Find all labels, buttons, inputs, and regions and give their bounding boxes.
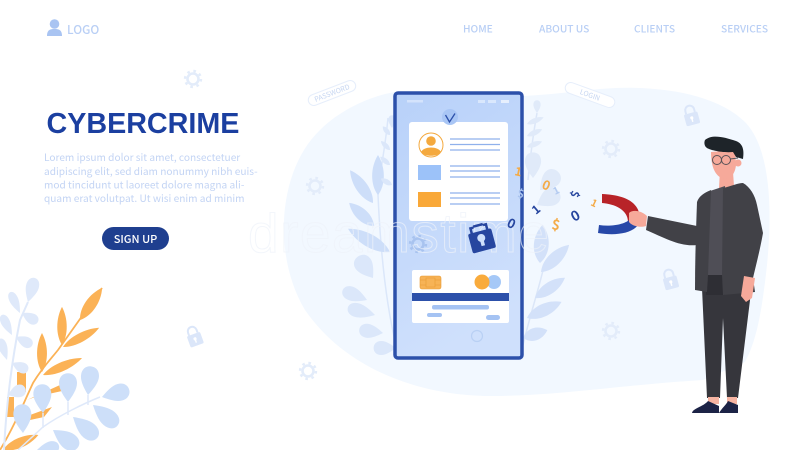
man with magnet	[598, 137, 763, 413]
check badge	[442, 109, 458, 125]
chip	[420, 276, 441, 289]
body text: mod tincidunt ut laoreet dolore magna ali-	[44, 176, 245, 192]
flying characters: 1	[513, 162, 524, 180]
tag: password: PASSWORD	[313, 82, 351, 105]
phone body	[395, 93, 522, 358]
navigation: menu links: CLIENTS	[634, 20, 675, 36]
flying characters	[504, 162, 601, 235]
body text: adipiscing elit, sed diam nonummy nibh euis-	[44, 163, 258, 178]
sign up button: SIGN UP	[114, 231, 157, 247]
plant: right of phone	[521, 100, 573, 345]
flying characters: 1	[550, 182, 562, 198]
body text: Lorem ipsum dolor sit amet, consectetuer	[44, 149, 240, 164]
decorative plant: bottom left, orange	[0, 285, 107, 450]
navigation: logo	[47, 19, 99, 38]
phone	[248, 93, 550, 358]
flying characters: 1	[589, 194, 601, 210]
flying characters: 0	[567, 205, 584, 226]
status bar	[407, 100, 509, 103]
jacket right	[722, 183, 763, 295]
flying characters: 0	[540, 174, 554, 195]
tag: login: LOGIN	[578, 87, 601, 104]
magnet	[598, 194, 640, 234]
background blob	[284, 88, 770, 396]
payment card	[412, 270, 509, 323]
hand holding magnet	[629, 211, 647, 227]
flying characters: $	[566, 189, 584, 199]
home fingerprint	[472, 330, 482, 342]
body text	[44, 149, 258, 205]
glasses	[712, 156, 738, 164]
legs	[702, 288, 751, 398]
jacket left	[695, 190, 711, 292]
arm	[646, 216, 697, 245]
flying characters: $	[516, 185, 525, 202]
navigation: menu links	[463, 20, 768, 36]
icon: user logo	[47, 19, 62, 36]
ear	[734, 160, 742, 166]
info card	[409, 122, 508, 221]
gear in phone	[410, 236, 426, 252]
flying characters: $	[550, 214, 562, 235]
tag: login	[564, 81, 616, 109]
decorative plant: bottom left, pale blue	[0, 276, 41, 450]
avatar icon	[419, 133, 443, 157]
hair	[704, 137, 743, 159]
icons: gears	[185, 71, 619, 379]
face	[711, 150, 736, 179]
orange image tile	[418, 192, 441, 207]
title: CYBERCRIME	[46, 108, 239, 140]
watermark: dreamstime	[248, 202, 550, 264]
tag: password	[307, 79, 357, 107]
padlock	[466, 222, 496, 254]
ankles	[708, 397, 737, 404]
flying characters: 1	[528, 200, 544, 218]
neck	[719, 170, 734, 190]
navigation: menu links: HOME	[463, 20, 493, 36]
flying characters: 0	[504, 212, 520, 233]
text lines	[450, 139, 500, 204]
blue image tile	[418, 165, 441, 180]
logo text: LOGO	[67, 21, 99, 38]
navigation: menu links: SERVICES	[721, 20, 768, 36]
card bars	[432, 305, 489, 310]
decorative plant: bottom left, blue	[13, 365, 131, 450]
body text: quam erat volutpat. Ut wisi enim ad minim	[44, 190, 245, 205]
card logo circles	[487, 275, 501, 289]
navigation: menu links: ABOUT US	[539, 20, 589, 36]
icons: padlocks	[184, 104, 700, 348]
shoes	[692, 401, 738, 413]
shirt	[707, 186, 725, 277]
belt area	[706, 275, 725, 295]
plant: left of phone	[340, 115, 396, 355]
sign up button	[102, 227, 169, 250]
hanging hand	[741, 276, 755, 302]
